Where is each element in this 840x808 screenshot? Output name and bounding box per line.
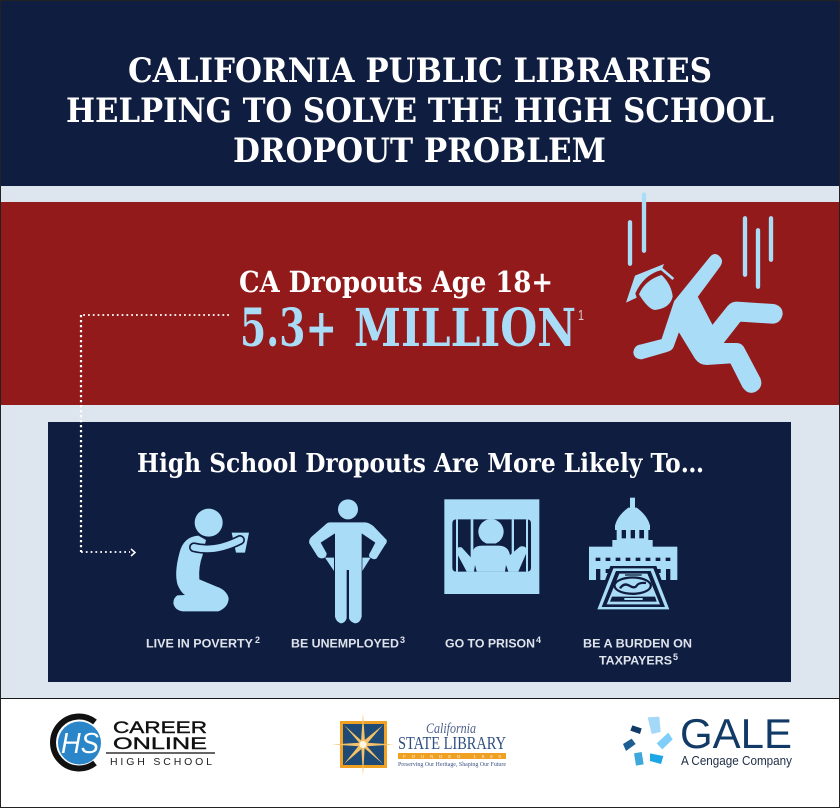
label: be a burden on taxpayers: BE A BURDEN ON <box>583 636 692 650</box>
logo: California State Library: Preserving Our Heritage, Shaping Our Future <box>398 761 506 768</box>
logo: Career Online High School: HIGH SCHOOL <box>110 756 212 768</box>
title <box>66 51 774 171</box>
logo: California State Library <box>332 713 506 776</box>
panel: logos <box>0 698 840 808</box>
label: be unemployed: 3 <box>400 635 405 645</box>
logo: California State Library: STATE LIBRARY <box>398 733 506 753</box>
footnote marker 1: 1 <box>578 307 584 324</box>
label: be a burden on taxpayers: 5 <box>673 652 678 662</box>
logo: Career Online High School: CAREER <box>113 718 207 737</box>
panel: dropout statistic <box>0 195 840 405</box>
panel: title banner <box>0 0 840 186</box>
big number <box>240 298 576 359</box>
label: live in poverty: 2 <box>255 635 260 645</box>
logo: Gale: A Cengage Company <box>681 754 793 768</box>
icon: kneeling person begging <box>173 509 249 611</box>
panel: consequences <box>48 422 791 682</box>
title: HELPING TO SOLVE THE HIGH SCHOOL <box>66 91 774 131</box>
title: DROPOUT PROBLEM <box>233 131 606 171</box>
logo: California State Library: FOUNDED 1850 <box>403 754 501 759</box>
logo: Gale <box>623 710 793 768</box>
icon: person with empty pockets <box>309 499 387 623</box>
label: be unemployed: BE UNEMPLOYED <box>291 636 399 650</box>
heading: more likely to: High School Dropouts Are More Likely To… <box>137 449 704 479</box>
icon: person behind bars <box>444 499 539 594</box>
label: live in poverty: LIVE IN POVERTY <box>146 636 253 650</box>
arrow: dotted connector <box>81 315 229 556</box>
big number: MILLION <box>354 298 576 359</box>
big number: 5.3+ <box>240 298 337 359</box>
logo: California State Library: California <box>426 721 476 737</box>
logo: Career Online High School <box>53 717 215 769</box>
logo: Career Online High School: ONLINE <box>113 734 207 753</box>
title: CALIFORNIA PUBLIC LIBRARIES <box>128 51 712 91</box>
icon: capitol building with money <box>589 498 677 612</box>
logo: Gale: GALE <box>680 710 792 757</box>
label: be a burden on taxpayers <box>583 636 692 668</box>
heading: CA dropouts: CA Dropouts Age 18+ <box>239 265 553 299</box>
logo: Career Online High School: HS <box>61 728 100 760</box>
label: go to prison: GO TO PRISON <box>445 636 535 650</box>
label: go to prison: 4 <box>536 635 541 645</box>
label: be a burden on taxpayers: TAXPAYERS <box>599 654 672 668</box>
icon: falling graduate <box>626 195 782 392</box>
